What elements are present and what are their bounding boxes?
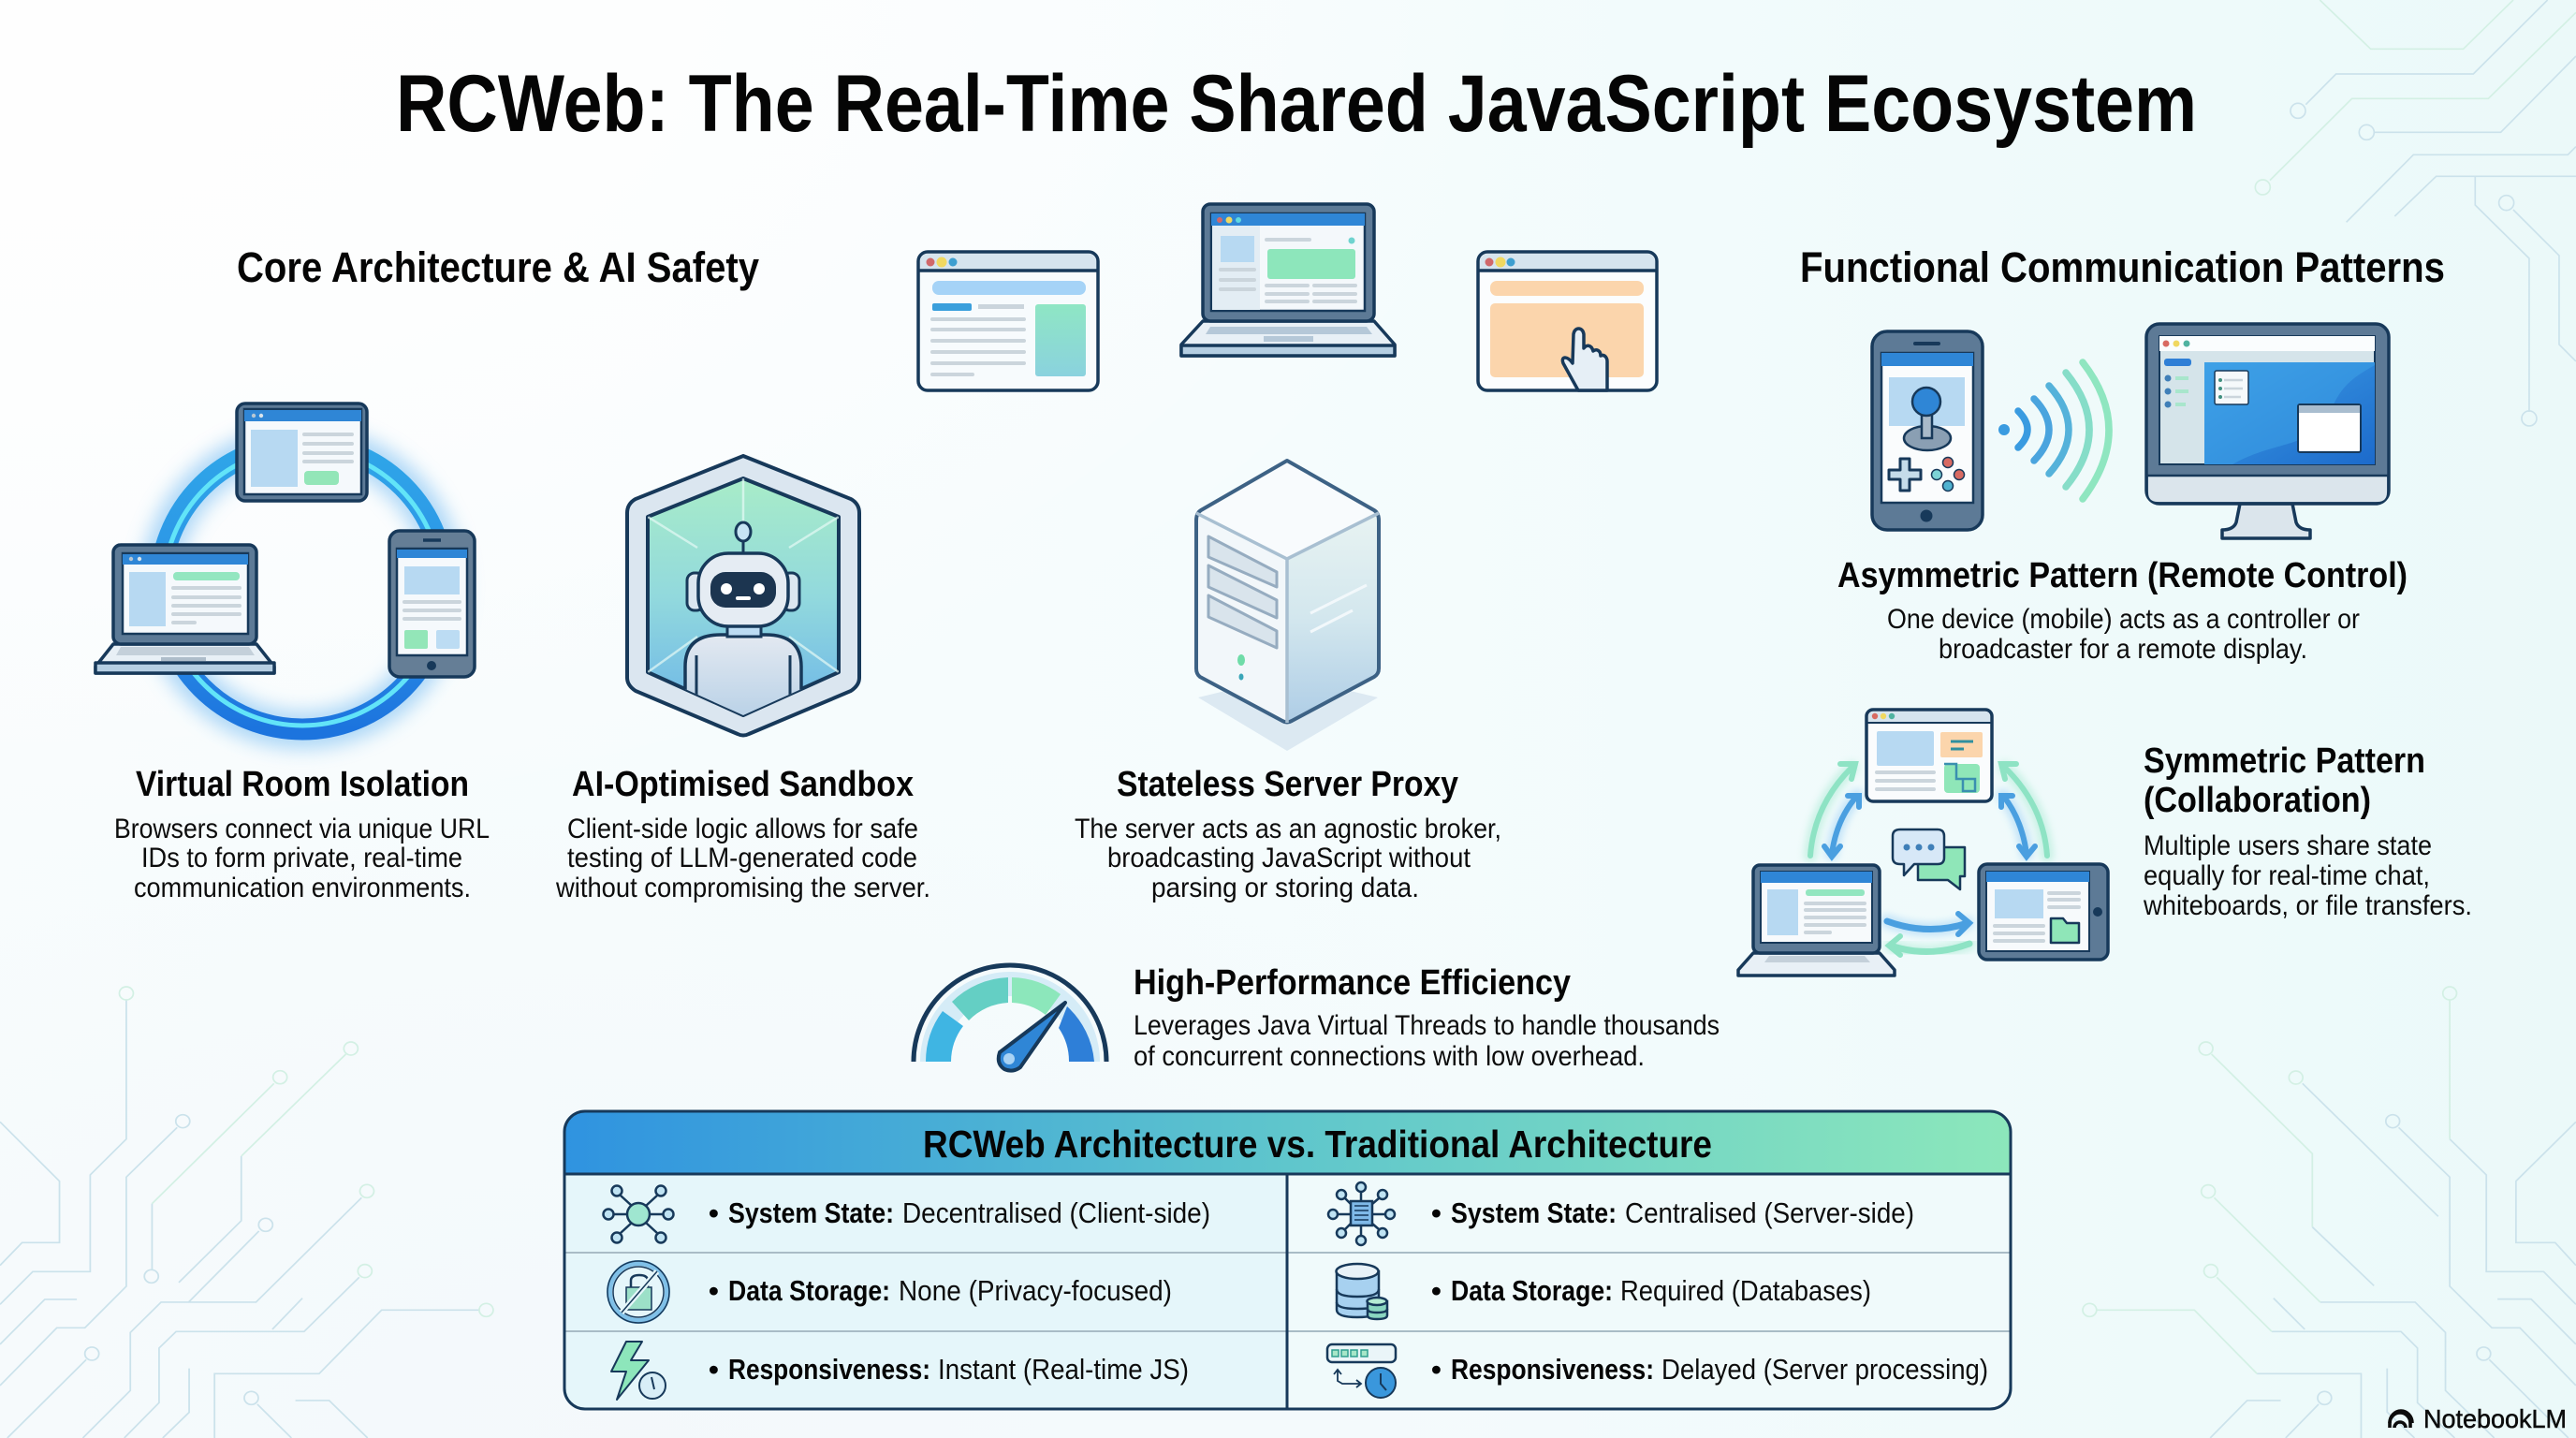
icon: AI robot sandbox hexagon (627, 456, 859, 740)
circuit pattern: bottom right (2083, 987, 2576, 1438)
text: AI-optimised sandbox (555, 765, 930, 903)
table backgrounds (564, 1111, 2011, 1409)
icon: browser window left (918, 252, 1098, 390)
icon: phone controller (1872, 331, 1983, 530)
row: system state decentralised: System State: (728, 1196, 894, 1229)
heading: communication patterns: Functional Communication Patterns (1800, 243, 2445, 291)
icon: symmetric collaboration diagram (1738, 710, 2108, 976)
row: system state centralised: Centralised (Server-side) (1625, 1196, 1914, 1229)
text: AI-optimised sandbox: AI-Optimised Sandbox (572, 765, 914, 804)
row: system state decentralised (709, 1196, 1210, 1229)
text: symmetric pattern: Multiple users share state (2144, 830, 2432, 861)
circuit pattern: top right (2255, 0, 2576, 426)
icon: database (1337, 1264, 1387, 1319)
title: RCWeb: The Real-Time Shared JavaScript Ecosystem (396, 59, 2197, 149)
row: system state centralised: • (1431, 1196, 1442, 1229)
row: responsiveness delayed (1431, 1353, 1988, 1386)
row: responsiveness instant: Instant (Real-time JS) (938, 1353, 1189, 1386)
text: asymmetric pattern: Asymmetric Pattern (Remote Control) (1837, 556, 2408, 595)
circuit pattern: bottom left (0, 987, 493, 1438)
icon: wireless signal waves (1998, 362, 2109, 499)
icon: laptop (95, 545, 274, 673)
NotebookLM logo: NotebookLM (2423, 1404, 2567, 1433)
text: symmetric pattern: equally for real-time chat, (2144, 860, 2430, 891)
tablet (1979, 864, 2108, 960)
arrows (1810, 764, 2047, 955)
laptop (1738, 865, 1895, 976)
table header: RCWeb Architecture vs. Traditional Architecture (923, 1123, 1712, 1166)
text: high-performance efficiency: of concurrent connections with low overhead. (1134, 1041, 1645, 1072)
icon: browser laptop centre (1181, 204, 1395, 356)
robot body (683, 633, 803, 715)
icon: phone (389, 531, 475, 677)
row: responsiveness instant (709, 1353, 1189, 1386)
heading: core architecture: Core Architecture & AI Safety (237, 243, 759, 291)
text: stateless server proxy: The server acts as an agnostic broker, (1075, 814, 1501, 844)
row: responsiveness delayed: Responsiveness: (1451, 1353, 1654, 1386)
icon: browser window right with hand (1478, 252, 1657, 390)
icon: no storage lock (607, 1261, 669, 1323)
text: stateless server proxy: broadcasting JavaScript without (1107, 843, 1471, 873)
icon: lightning and clock (611, 1342, 666, 1400)
row: system state centralised (1431, 1196, 1914, 1229)
row: data storage required (1431, 1274, 1871, 1307)
text: virtual room isolation: Virtual Room Isolation (136, 765, 469, 804)
row: system state decentralised: Decentralised (Client-side) (902, 1196, 1210, 1229)
row: responsiveness instant: Responsiveness: (728, 1353, 930, 1386)
row: data storage none (709, 1274, 1172, 1307)
text: stateless server proxy (1075, 765, 1501, 903)
icon: glowing ring (159, 444, 446, 730)
comparison table (564, 1111, 2011, 1409)
text: virtual room isolation: Browsers connect via unique URL (114, 814, 490, 844)
row: data storage required: Required (Databases) (1620, 1274, 1871, 1307)
icon: performance gauge (914, 965, 1106, 1071)
text: asymmetric pattern: One device (mobile) acts as a controller or (1887, 604, 2360, 635)
row: data storage none: None (Privacy-focused) (899, 1274, 1172, 1307)
text: symmetric pattern: (Collaboration) (2144, 781, 2371, 820)
icon: virtual room ring with devices (95, 404, 475, 730)
text: stateless server proxy: parsing or storing data. (1151, 873, 1419, 903)
row: responsiveness instant: • (709, 1353, 719, 1386)
icon: notebook arcs (2390, 1411, 2412, 1428)
text: symmetric pattern: Symmetric Pattern (2144, 741, 2425, 781)
text: asymmetric pattern (1837, 556, 2408, 665)
text: high-performance efficiency: High-Performance Efficiency (1134, 963, 1571, 1003)
icon: central server network (1328, 1182, 1395, 1245)
row: system state decentralised: • (709, 1196, 719, 1229)
icon: stateless server (1196, 461, 1379, 751)
row: data storage none: Data Storage: (728, 1274, 890, 1307)
text: AI-optimised sandbox: Client-side logic allows for safe (567, 814, 918, 844)
text: virtual room isolation (114, 765, 490, 903)
window (1866, 710, 1992, 801)
icon: delayed request and clock (1327, 1344, 1396, 1398)
text: symmetric pattern: whiteboards, or file transfers. (2143, 890, 2472, 921)
text: symmetric pattern (2143, 741, 2472, 921)
text: virtual room isolation: communication environments. (134, 873, 471, 903)
row: responsiveness delayed: • (1431, 1353, 1442, 1386)
row: system state centralised: System State: (1451, 1196, 1617, 1229)
text: virtual room isolation: IDs to form private, real-time (141, 843, 462, 873)
text: asymmetric pattern: broadcaster for a remote display. (1939, 634, 2307, 665)
row: data storage required: Data Storage: (1451, 1274, 1613, 1307)
text: stateless server proxy: Stateless Server Proxy (1117, 765, 1458, 804)
icon: decentralised network (603, 1185, 674, 1243)
text: AI-optimised sandbox: without compromising the server. (555, 873, 930, 903)
row: data storage required: • (1431, 1274, 1442, 1307)
icon: remote monitor (2146, 324, 2389, 538)
text: high-performance efficiency: Leverages Java Virtual Threads to handle thousands (1134, 1010, 1720, 1041)
text: high-performance efficiency (1134, 963, 1720, 1072)
row: data storage none: • (709, 1274, 719, 1307)
text: AI-optimised sandbox: testing of LLM-generated code (567, 843, 917, 873)
icon: tablet (237, 404, 367, 501)
chat bubbles (1893, 829, 1965, 889)
row: responsiveness delayed: Delayed (Server processing) (1661, 1353, 1988, 1386)
